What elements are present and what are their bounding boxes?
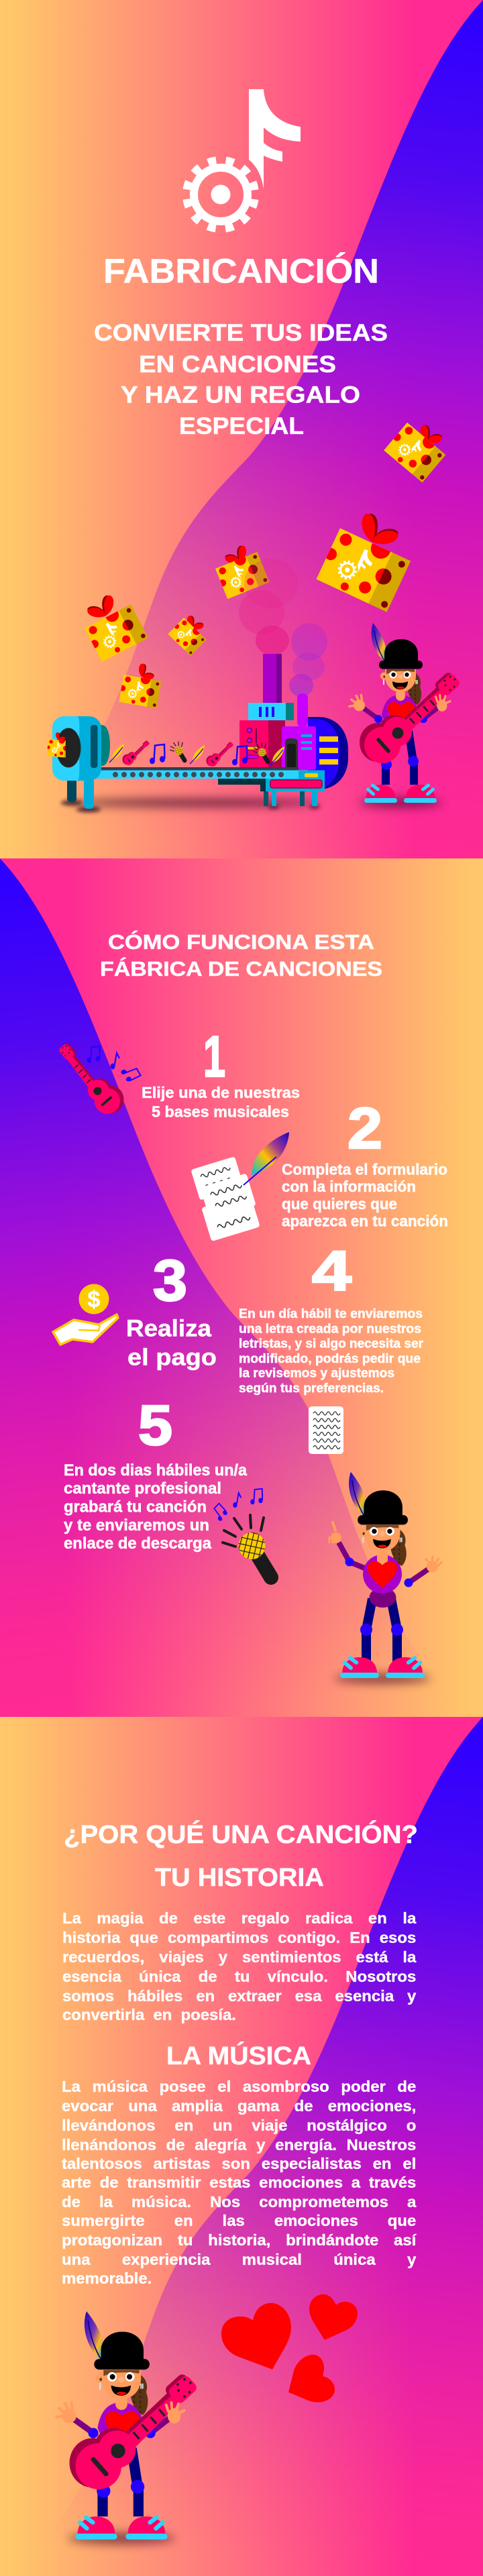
step 4: letristas, y si algo necesita ser — [239, 1336, 423, 1351]
step 2 — [282, 1097, 448, 1230]
heading: how it works — [100, 930, 382, 981]
step 2: 2 — [347, 1097, 382, 1161]
illustration: character pointing — [329, 1472, 443, 1684]
step 5: cantante profesional — [64, 1479, 221, 1498]
background: section 2 gradient and mirrored wave — [0, 858, 483, 1717]
step 5 — [64, 1394, 248, 1553]
step 1: Elije una de nuestras — [142, 1084, 300, 1101]
text: recuerdos, viajes y sentimientos está la — [62, 1948, 416, 1966]
text: talentosos artistas son especialistas en el — [62, 2154, 416, 2172]
step 4: según tus preferencias. — [239, 1381, 384, 1396]
icon: hearts — [221, 2294, 358, 2402]
step 5: y te enviaremos un — [64, 1516, 209, 1534]
smoke pink — [239, 559, 298, 655]
step 5: 5 — [138, 1394, 172, 1457]
heading: your story: TU HISTORIA — [155, 1864, 324, 1892]
icon: lyrics sheet — [309, 1406, 343, 1454]
title: FABRICANCIÓN — [103, 252, 379, 290]
step 2: aparezca en tu canción — [282, 1213, 448, 1230]
logo: gear and music note — [187, 89, 301, 228]
icon: microphone with notes — [211, 1489, 271, 1577]
step 4: la revisemos y ajustemos — [239, 1365, 394, 1380]
text: somos hábiles en extraer esa esencia y — [62, 1987, 416, 2005]
text: esencia única de tu vínculo. Nosotros — [62, 1968, 416, 1985]
step 1: 1 — [203, 1025, 225, 1089]
text: de la música. Nos comprometemos a — [62, 2193, 416, 2210]
illustration: character with guitar, bottom — [53, 2311, 199, 2544]
smoke purple — [289, 623, 327, 697]
illustration: character with guitar — [347, 623, 462, 808]
text: convertirla en poesía. — [62, 2006, 236, 2023]
heading: how it works: FÁBRICA DE CANCIONES — [100, 957, 382, 981]
text: historia que compartimos contigo. En esos — [62, 1929, 416, 1946]
step 5: enlace de descarga — [64, 1534, 212, 1553]
text: evocar una amplia gama de emociones, — [62, 2097, 416, 2115]
text: memorable. — [62, 2270, 152, 2287]
subtitle: Y HAZ UN REGALO — [121, 382, 360, 408]
step 3: 3 — [153, 1249, 187, 1313]
icon: floating gift large — [313, 514, 415, 612]
step 4: En un día hábil te enviaremos — [239, 1306, 423, 1321]
text: arte de transmitir estas emociones a través — [62, 2174, 416, 2191]
icon: hand with coin — [53, 1284, 118, 1345]
step 3: el pago — [127, 1344, 217, 1371]
heading: how it works: CÓMO FUNCIONA ESTA — [108, 930, 374, 954]
icon: floating gift top — [382, 416, 449, 483]
icon: hand with coin: $ — [88, 1287, 101, 1312]
step 3: Realiza — [126, 1316, 212, 1341]
step 3 — [126, 1249, 217, 1371]
heading: the music: LA MÚSICA — [166, 2041, 311, 2070]
illustration: factory machine — [46, 559, 348, 812]
step 4: 4 — [312, 1239, 352, 1302]
step 4: una letra creada por nuestros — [239, 1321, 421, 1336]
text: La música posee el asombroso poder de — [62, 2078, 416, 2095]
text: La magia de este regalo radica en la — [62, 1909, 416, 1927]
subtitle: ESPECIAL — [179, 413, 304, 439]
step 1 — [142, 1025, 300, 1120]
step 2: Completa el formulario — [282, 1160, 447, 1178]
icon: guitar with notes — [50, 1042, 141, 1116]
step 5: grabará tu canción — [64, 1498, 207, 1516]
background: section 1 gradient and wave — [0, 0, 483, 858]
icon: lyrics sheets and feather — [191, 1132, 289, 1241]
step 5: En dos dias hábiles un/a — [64, 1461, 248, 1479]
icon: floating gift lower — [117, 663, 162, 708]
text block: la música — [62, 2078, 417, 2287]
icon: floating gift centre — [211, 546, 270, 600]
subtitle: CONVIERTE TUS IDEAS — [94, 320, 388, 346]
conveyor items — [109, 744, 124, 763]
text: llevándonos en un viaje nostálgico o — [62, 2117, 416, 2134]
step 2: que quieres que — [282, 1195, 397, 1213]
step 4 — [239, 1239, 423, 1396]
text: protagonizan tu historia, brindándote así — [62, 2231, 416, 2249]
text: sumergirte en las emociones que — [62, 2212, 416, 2229]
background: section 3 gradient and wave — [0, 1717, 483, 2576]
heading: why a song: ¿POR QUÉ UNA CANCIÓN? — [64, 1819, 418, 1849]
step 2: con la información — [282, 1178, 416, 1195]
step 1: 5 bases musicales — [152, 1103, 289, 1120]
subtitle — [94, 320, 388, 439]
icon: floating gift left — [80, 596, 148, 663]
step 4: modificado, podrás pedir que — [239, 1351, 421, 1366]
icon: floating gift small — [167, 614, 209, 656]
text: una experiencia musical única y — [62, 2251, 416, 2268]
text: llenándonos de alegría y energía. Nuestros — [62, 2136, 416, 2153]
text block: tu historia — [62, 1909, 417, 2024]
subtitle: EN CANCIONES — [139, 351, 336, 378]
